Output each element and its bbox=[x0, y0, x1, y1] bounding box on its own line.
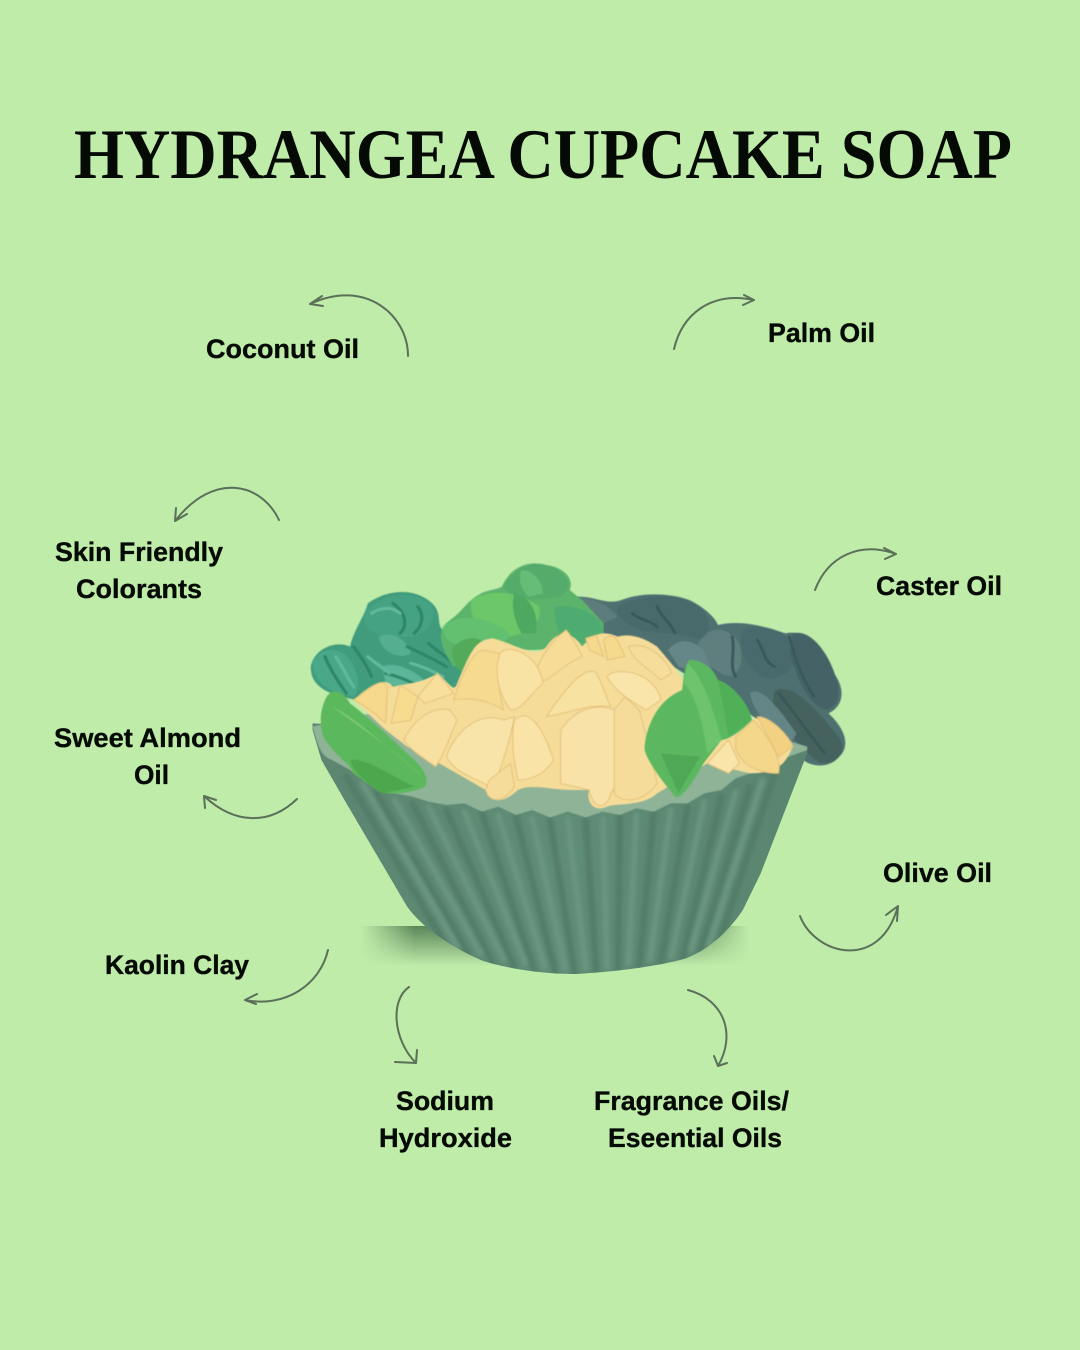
dark flower ripples bbox=[632, 607, 825, 753]
cup rim bbox=[312, 697, 807, 817]
arrow: Caster Oil bbox=[815, 548, 896, 590]
label: Coconut Oil: Coconut Oil bbox=[206, 334, 359, 364]
arrow: Coconut Oil bbox=[310, 295, 408, 356]
cupcake shadow bbox=[350, 926, 760, 966]
cup ribs bbox=[346, 773, 775, 975]
cup base with ribs bbox=[312, 697, 807, 975]
yellow piped frosting bbox=[354, 630, 793, 808]
arrow: Sweet Almond Oil bbox=[204, 796, 297, 818]
label: Skin Friendly Colorants: Skin Friendly bbox=[55, 537, 223, 567]
arrow: Fragrance Oils bbox=[688, 990, 727, 1066]
infographic canvas bbox=[54, 130, 1010, 1153]
dark slate flowers bbox=[568, 594, 845, 765]
frosting petals bbox=[354, 630, 793, 805]
label: Skin Friendly Colorants: Colorants bbox=[76, 574, 202, 604]
teal petal ridges bbox=[325, 603, 454, 693]
green leaf right bbox=[645, 660, 752, 797]
arrow: Olive Oil bbox=[800, 906, 898, 950]
label: Kaolin Clay: Kaolin Clay bbox=[105, 950, 249, 980]
label: Palm Oil: Palm Oil bbox=[768, 318, 875, 348]
label: Sweet Almond Oil: Sweet Almond bbox=[54, 723, 241, 753]
arrow: Skin Friendly Colorants bbox=[175, 488, 279, 521]
arrow: Kaolin Clay bbox=[245, 950, 328, 1004]
green flowers bbox=[441, 563, 604, 673]
label: Caster Oil: Caster Oil bbox=[876, 571, 1002, 601]
label: Sweet Almond Oil: Oil bbox=[134, 760, 169, 790]
label: Fragrance Oils / Essential Oils: Eseential Oils bbox=[608, 1123, 782, 1153]
label: Sodium Hydroxide: Hydroxide bbox=[379, 1123, 512, 1153]
cupcake soap illustration bbox=[311, 563, 845, 975]
label: Olive Oil: Olive Oil bbox=[883, 858, 992, 888]
label: Sodium Hydroxide: Sodium bbox=[396, 1086, 494, 1116]
teal flowers bbox=[311, 592, 471, 700]
label: Fragrance Oils / Essential Oils: Fragrance Oils/ bbox=[594, 1086, 789, 1116]
green leaf left bbox=[321, 692, 427, 794]
arrow: Palm Oil bbox=[674, 295, 754, 349]
arrow: Sodium Hydroxide bbox=[395, 987, 417, 1063]
